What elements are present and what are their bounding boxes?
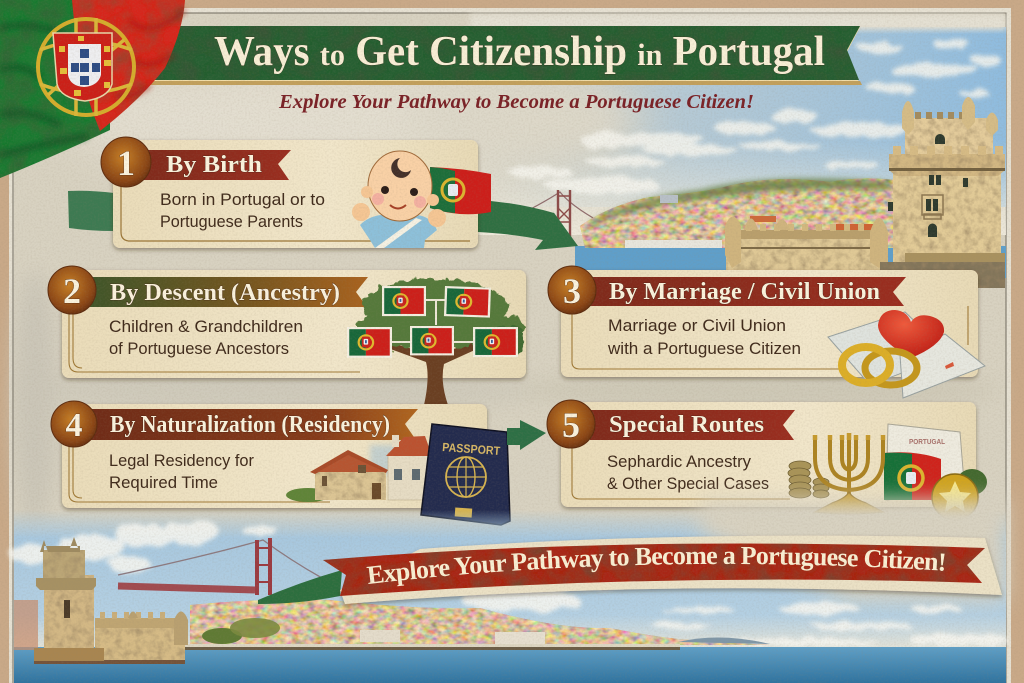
description: of Portuguese Ancestors	[109, 339, 289, 358]
tower: Belem bottom left	[14, 537, 188, 664]
number badge: 3	[563, 271, 581, 311]
icon: baby with flag	[352, 151, 491, 248]
description: Portuguese Parents	[160, 212, 303, 231]
description: & Other Special Cases	[607, 474, 769, 493]
panel: special routes	[547, 400, 987, 520]
bottom banner	[258, 535, 1004, 608]
title banner	[150, 26, 862, 85]
heading ribbon	[84, 277, 368, 307]
city hill: top	[580, 178, 895, 248]
coat of arms	[38, 18, 134, 116]
icon: passport	[421, 424, 510, 525]
heading: By Marriage / Civil Union	[609, 279, 880, 305]
description: Required Time	[109, 473, 218, 492]
number badge: 4	[66, 407, 82, 444]
icon: family tree with flags	[347, 279, 525, 405]
panel: by birth	[101, 137, 491, 248]
green ribbon behind card 1	[68, 191, 114, 231]
number badge	[547, 400, 595, 448]
fortress turrets	[725, 216, 888, 268]
heading: By Naturalization (Residency)	[110, 412, 390, 438]
description	[160, 190, 325, 231]
city hill: bottom	[185, 600, 770, 650]
icon: document with flag	[884, 424, 965, 500]
cream backing	[340, 536, 1002, 604]
flag	[430, 167, 491, 214]
trunk	[385, 340, 488, 405]
heading ribbon	[590, 410, 795, 440]
body	[360, 215, 437, 248]
windows	[888, 134, 968, 237]
description	[607, 452, 769, 493]
banner text path	[368, 564, 948, 584]
description: Legal Residency for	[109, 451, 254, 470]
upper tier	[905, 118, 993, 154]
clouds: bottom	[10, 521, 1010, 646]
description	[109, 317, 303, 358]
icon: rings and heart	[828, 310, 985, 398]
icon: passport: PASSPORT	[442, 440, 501, 458]
tower body	[893, 165, 1001, 280]
heading ribbon	[590, 277, 906, 306]
bridge: bottom	[118, 538, 322, 595]
description: Sephardic Ancestry	[607, 452, 751, 471]
description	[607, 316, 801, 358]
flags	[347, 286, 518, 358]
icon: coins	[788, 461, 829, 498]
head	[368, 151, 432, 221]
arrow: card 1 to city	[478, 200, 578, 250]
description: Born in Portugal or to	[160, 190, 325, 209]
green tail	[258, 570, 342, 604]
bastion base	[880, 262, 1005, 288]
number badge	[101, 137, 151, 187]
icon: star coin	[932, 469, 987, 520]
heading: Special Routes	[609, 412, 764, 438]
red ribbon	[323, 544, 985, 596]
sky: bottom	[14, 500, 1006, 650]
arms	[352, 203, 370, 221]
heading ribbon	[90, 409, 418, 440]
documents	[828, 312, 950, 385]
turrets	[902, 97, 998, 136]
flag: top left corner	[0, 0, 185, 178]
number badge	[51, 401, 97, 447]
top crenels	[915, 112, 965, 119]
clouds: top right	[506, 38, 999, 193]
heading: By Descent (Ancestry)	[110, 280, 340, 306]
fortress wall	[726, 224, 886, 270]
number badge	[548, 266, 596, 314]
panel: by naturalization	[51, 401, 510, 525]
water: bottom	[14, 647, 1006, 683]
subtitle: Explore Your Pathway to Become a Portuguese Citizen!	[278, 91, 754, 113]
description: with a Portuguese Citizen	[607, 339, 801, 358]
number badge: 2	[63, 271, 81, 311]
connectors	[391, 300, 473, 342]
balcony	[922, 195, 943, 219]
sky: top right	[400, 14, 1006, 235]
number badge: 5	[562, 405, 580, 445]
description: Marriage or Civil Union	[608, 316, 786, 335]
icon: document with flag: PORTUGAL	[909, 439, 946, 446]
rings	[865, 351, 917, 385]
number badge: 1	[117, 143, 135, 183]
banner text: Explore Your Pathway to Become a Portuguese Citizen!	[366, 547, 945, 586]
tower: Belem top right	[725, 97, 1005, 290]
foliage	[348, 279, 525, 357]
icon: houses	[286, 435, 432, 502]
icon: menorah	[815, 433, 883, 514]
title text: Ways to Get Citizenship in Portugal	[214, 29, 825, 75]
description: Children & Grandchildren	[109, 317, 303, 336]
panel: by marriage	[548, 266, 985, 398]
heading: By Birth	[166, 152, 262, 178]
water: top	[575, 246, 1006, 278]
number badge	[48, 266, 96, 314]
parapet	[889, 154, 1005, 176]
description	[109, 451, 254, 492]
distant bridge: top	[505, 190, 600, 240]
heart	[878, 310, 944, 358]
panel: by descent	[48, 266, 526, 405]
arrow: card 4 to card 5	[507, 420, 546, 450]
heading ribbon	[140, 150, 291, 180]
